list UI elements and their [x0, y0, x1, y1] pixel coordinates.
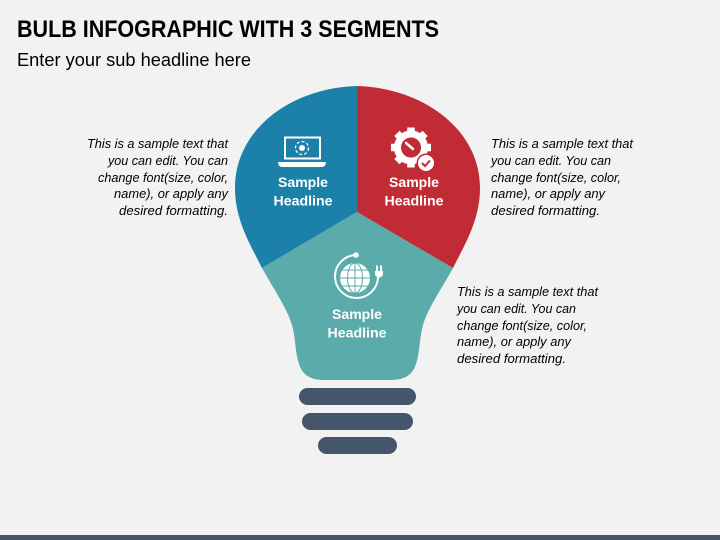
- title: BULB INFOGRAPHIC WITH 3 SEGMENTS: [17, 16, 439, 43]
- icon: laptop: [278, 138, 326, 167]
- subtitle: Enter your sub headline here: [17, 50, 251, 70]
- text block: left: name), or apply any: [114, 187, 229, 201]
- headline: teal segment: [328, 306, 387, 340]
- text block: left: you can edit. You can: [107, 154, 228, 168]
- headline: red segment: [384, 174, 444, 208]
- text block: lower right: change font(size, color,: [457, 319, 587, 333]
- headline: teal segment: Sample: [332, 306, 382, 322]
- text block: right: change font(size, color,: [491, 171, 621, 185]
- bulb base bar 2: [302, 413, 413, 430]
- headline: blue segment: [274, 174, 333, 208]
- headline: blue segment: Sample: [278, 174, 328, 190]
- bulb base bar 1: [299, 388, 416, 405]
- text block: right: [490, 137, 634, 218]
- panel: teal segment: [262, 212, 453, 380]
- panel: red segment: [357, 86, 480, 268]
- headline: blue segment: Headline: [274, 192, 333, 208]
- headline: red segment: Sample: [389, 174, 439, 190]
- bulb illustration: [235, 86, 480, 454]
- text block: lower right: you can edit. You can: [456, 302, 576, 316]
- text block: right: you can edit. You can: [490, 154, 611, 168]
- footer bar: [0, 535, 720, 540]
- headline: red segment: Headline: [384, 192, 444, 208]
- icon: globe with plug: [335, 252, 383, 298]
- text block: lower right: [456, 285, 599, 366]
- headline: teal segment: Headline: [328, 324, 387, 340]
- text block: right: name), or apply any: [491, 187, 606, 201]
- text block: left: [87, 137, 229, 218]
- text block: left: change font(size, color,: [98, 171, 228, 185]
- text block: left: This is a sample text that: [87, 137, 229, 151]
- text block: right: This is a sample text that: [491, 137, 634, 151]
- text block: left: desired formatting.: [119, 204, 228, 218]
- icon: gear with check badge: [391, 128, 436, 172]
- text block: lower right: desired formatting.: [457, 352, 566, 366]
- text block: lower right: name), or apply any: [457, 335, 572, 349]
- text block: right: desired formatting.: [491, 204, 600, 218]
- panel: blue segment: [235, 86, 357, 268]
- text block: lower right: This is a sample text that: [457, 285, 599, 299]
- bulb base bar 3: [318, 437, 397, 454]
